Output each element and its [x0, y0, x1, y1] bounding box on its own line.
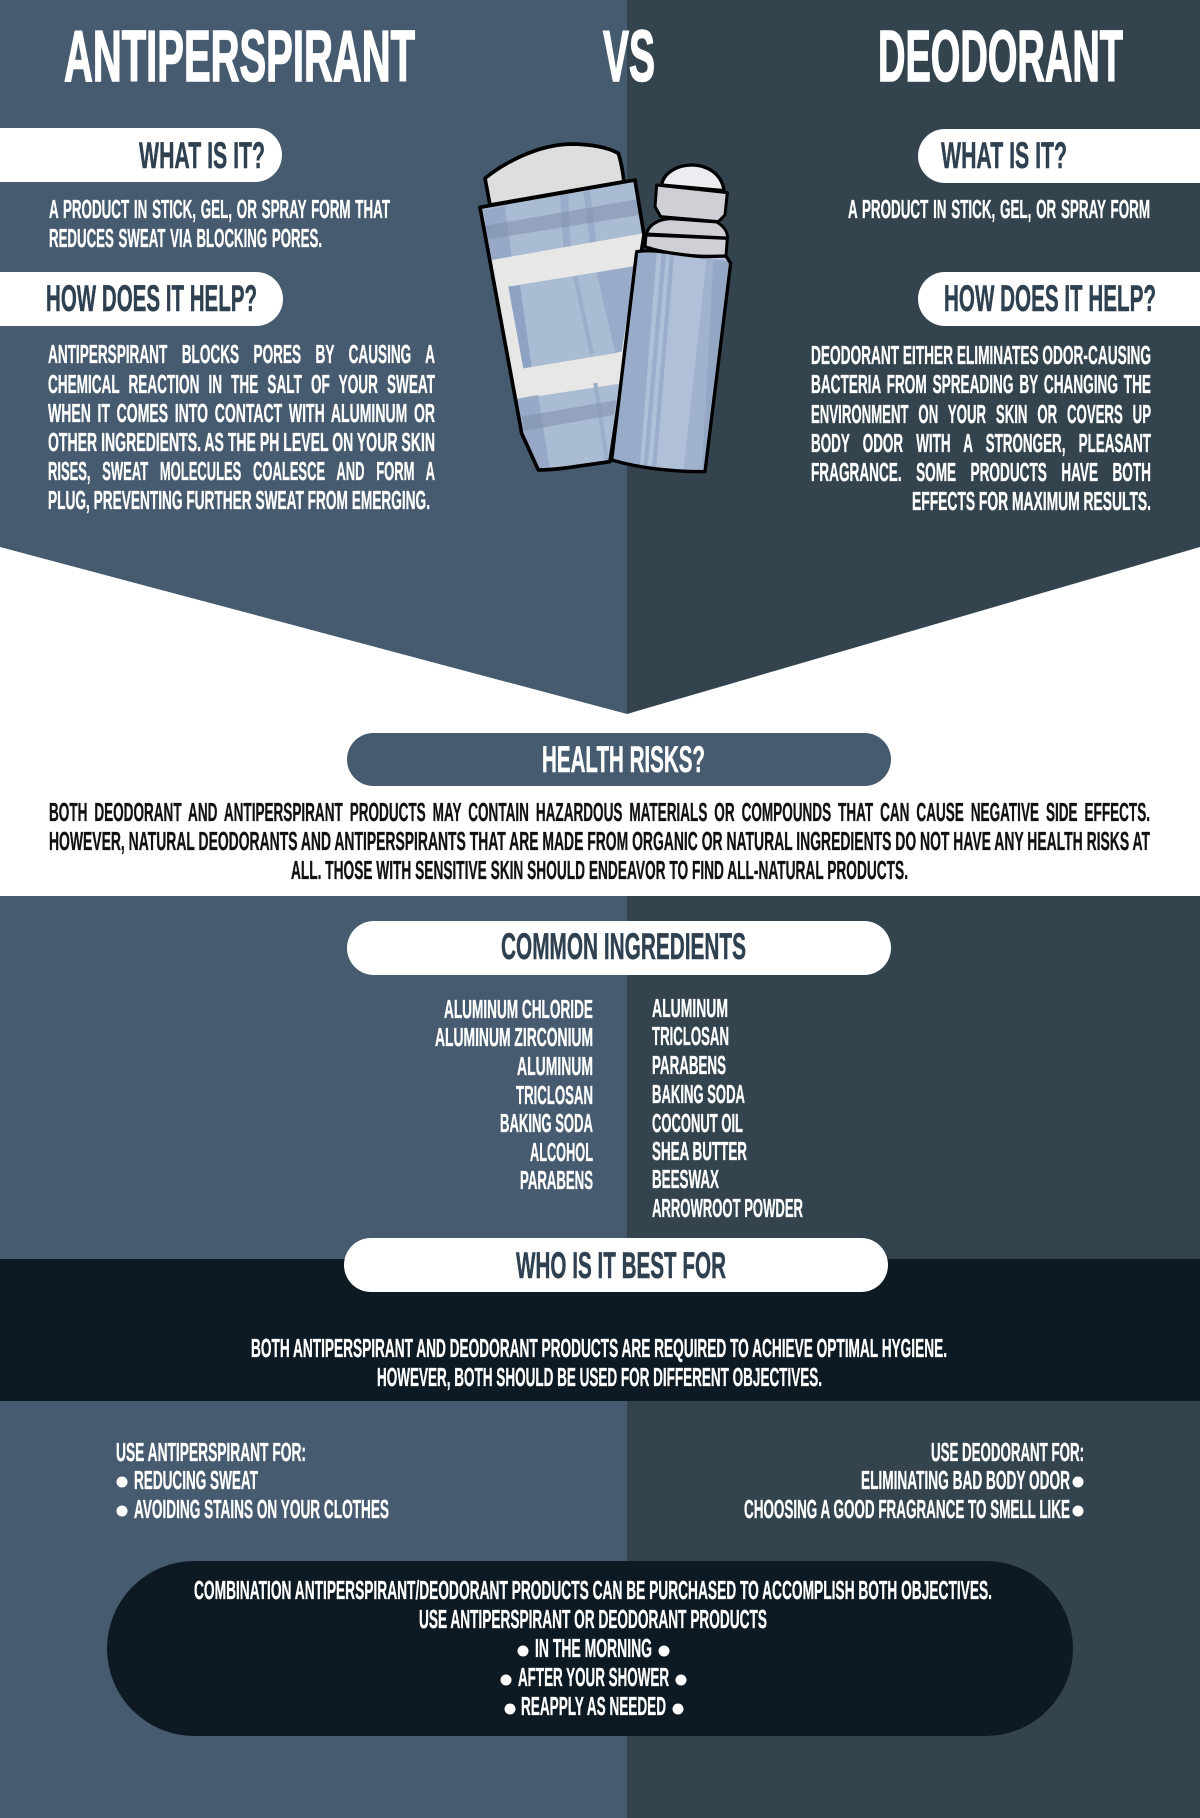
- list: when to apply: REAPPLY AS NEEDED: [521, 1693, 666, 1721]
- text block: how does it help left: CHEMICAL REACTION IN THE SALT OF YOUR SWEAT: [48, 371, 435, 399]
- text block: what is it left: A PRODUCT IN STICK, GEL, OR SPRAY FORM THAT: [49, 196, 390, 224]
- list: when to apply: [500, 1635, 686, 1721]
- list: when to apply: AFTER YOUR SHOWER: [518, 1664, 669, 1692]
- heading: what is it right: WHAT IS IT?: [941, 135, 1067, 176]
- list: when to apply: IN THE MORNING: [535, 1635, 652, 1663]
- icon: stick body: [473, 177, 653, 477]
- panel: deodorant lower column: [627, 896, 1200, 1818]
- panel: health risks: [49, 733, 1150, 885]
- text block: what is it left: [49, 196, 390, 253]
- icon: roll-on body: [612, 249, 732, 474]
- pill: what is it left: [0, 128, 282, 182]
- text block: how does it help left: [48, 341, 435, 515]
- list: antiperspirant ingredients: [435, 996, 593, 1195]
- list: antiperspirant ingredients: ALUMINUM ZIRCONIUM: [435, 1024, 593, 1052]
- icon: stick cap: [485, 144, 624, 205]
- pill: what is it right: [918, 129, 1200, 183]
- list: antiperspirant ingredients: ALUMINUM: [517, 1053, 593, 1081]
- panel: common ingredients: [347, 921, 891, 1223]
- pill: who is it best for: [344, 1238, 888, 1292]
- panel: antiperspirant lower column: [0, 896, 627, 1818]
- text block: how does it help left: RISES, SWEAT MOLECULES COALESCE AND FORM A: [48, 458, 435, 486]
- panel: deodorant how does it help: [811, 272, 1200, 516]
- panel: common ingredients: ALCOHOL: [530, 1139, 593, 1167]
- text block: health risks: [49, 799, 1150, 885]
- pill: health risks: [347, 733, 891, 786]
- list: deodorant ingredients: PARABENS: [652, 1052, 726, 1080]
- pill: how does it help right: [918, 272, 1200, 326]
- text block: both products required: [251, 1335, 947, 1392]
- icon: antiperspirant stick and roll-on bottle: [473, 144, 740, 480]
- list: deodorant ingredients: BAKING SODA: [652, 1081, 745, 1109]
- list: use antiperspirant for: AVOIDING STAINS ON YOUR CLOTHES: [134, 1496, 389, 1524]
- text block: combination products: [194, 1577, 992, 1634]
- list: use antiperspirant for: USE ANTIPERSPIRANT FOR:: [116, 1439, 306, 1467]
- band: dark background: [0, 1259, 1200, 1401]
- list: use antiperspirant for: [116, 1439, 389, 1524]
- list: deodorant ingredients: COCONUT OIL: [652, 1110, 743, 1138]
- text block: what is it left: REDUCES SWEAT VIA BLOCKING PORES.: [49, 225, 322, 253]
- panel: antiperspirant top chevron: [0, 0, 627, 714]
- list: deodorant ingredients: ALUMINUM: [652, 995, 728, 1023]
- text block: how does it help left: ANTIPERSPIRANT BLOCKS PORES BY CAUSING A: [48, 341, 435, 369]
- panel: combination products callout: [107, 1561, 1073, 1736]
- panel: deodorant what is it: [848, 129, 1200, 224]
- text block: how does it help right: [811, 342, 1151, 516]
- list: antiperspirant ingredients: PARABENS: [520, 1167, 593, 1195]
- text block: how does it help left: PLUG, PREVENTING FURTHER SWEAT FROM EMERGING.: [48, 487, 430, 515]
- icon: roll-on collar: [645, 185, 727, 256]
- list: use antiperspirant for: REDUCING SWEAT: [134, 1467, 258, 1495]
- list: deodorant ingredients: SHEA BUTTER: [652, 1138, 747, 1166]
- callout: dark pill: [107, 1561, 1073, 1736]
- icon: roll-on ball: [662, 165, 724, 191]
- list: deodorant ingredients: ARROWROOT POWDER: [652, 1195, 803, 1223]
- list: antiperspirant ingredients: BAKING SODA: [500, 1110, 593, 1138]
- panel: who is it best for band: [0, 1238, 1200, 1401]
- list: deodorant ingredients: BEESWAX: [652, 1166, 719, 1194]
- text block: both products required: HOWEVER, BOTH SHOULD BE USED FOR DIFFERENT OBJECTIVES.: [377, 1364, 822, 1392]
- text block: how does it help left: WHEN IT COMES INTO CONTACT WITH ALUMINUM OR: [48, 400, 435, 428]
- panel: antiperspirant how does it help: [0, 272, 435, 515]
- text block: combination products: USE ANTIPERSPIRANT OR DEODORANT PRODUCTS: [419, 1606, 767, 1634]
- heading: who is it best for: WHO IS IT BEST FOR: [516, 1245, 726, 1286]
- list: deodorant ingredients: TRICLOSAN: [652, 1023, 729, 1051]
- text block: how does it help left: OTHER INGREDIENTS. AS THE PH LEVEL ON YOUR SKIN: [48, 429, 435, 457]
- heading: health risks: HEALTH RISKS?: [542, 739, 705, 780]
- panel: deodorant top chevron: [627, 0, 1200, 714]
- list: use deodorant for: [744, 1439, 1084, 1524]
- list: antiperspirant ingredients: ALUMINUM CHLORIDE: [444, 996, 593, 1024]
- panel: antiperspirant what is it: [0, 128, 390, 253]
- list: antiperspirant ingredients: TRICLOSAN: [516, 1082, 593, 1110]
- title: vs: VS: [603, 17, 655, 97]
- pill: common ingredients: [347, 921, 891, 975]
- pill: how does it help left: [0, 272, 283, 326]
- heading: how does it help left: HOW DOES IT HELP?: [46, 278, 257, 319]
- heading: common ingredients: COMMON INGREDIENTS: [501, 926, 746, 967]
- title: antiperspirant: ANTIPERSPIRANT: [64, 17, 415, 97]
- heading: what is it left: WHAT IS IT?: [139, 135, 265, 176]
- list: deodorant ingredients: [652, 995, 803, 1223]
